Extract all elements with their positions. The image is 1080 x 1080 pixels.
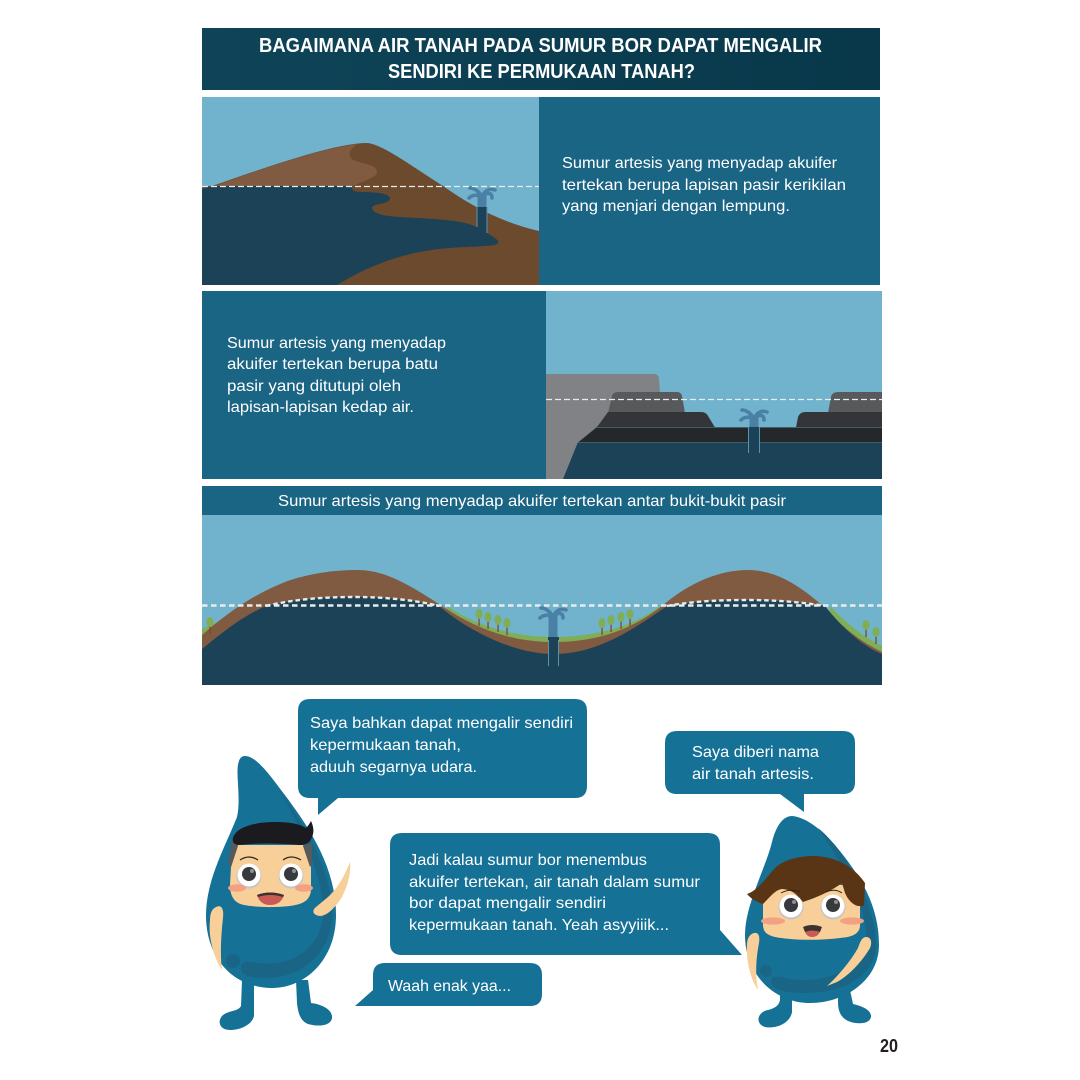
- speech bubble: right character explanation: bor dapat mengalir sendiri: [409, 895, 606, 912]
- speech bubble: right character explanation: kepermukaan tanah. Yeah asyyiiik...: [409, 917, 669, 934]
- eyes: [236, 864, 304, 888]
- speech bubble: right character explanation: Jadi kalau sumur bor menembus: [409, 852, 647, 869]
- panel: sand dunes aquifer: [202, 486, 882, 685]
- cheeks: [228, 884, 246, 892]
- speech bubble: left character: aduuh segarnya udara.: [310, 759, 477, 776]
- panel: sandstone aquifer illustration: [546, 291, 882, 479]
- mouth: [804, 926, 821, 937]
- character: left water drop boy: [206, 756, 350, 1030]
- speech bubble: right character explanation: akuifer tertekan, air tanah dalam sumur: [409, 874, 701, 891]
- impermeable layer: middle: [597, 412, 882, 428]
- artesian well and fountain: [469, 188, 495, 234]
- trees: [206, 609, 880, 644]
- hill: dark clay: [202, 143, 539, 285]
- face: [763, 885, 860, 940]
- legs and feet: [220, 980, 332, 1030]
- aquifer top dashed line: [266, 597, 825, 606]
- raised arm: [313, 862, 350, 916]
- eyebrows: [781, 890, 842, 893]
- speech bubble: right character name: Saya diberi nama: [692, 744, 819, 761]
- drop body: [206, 756, 336, 988]
- hair: [233, 821, 313, 845]
- drop body: [745, 816, 879, 1003]
- impermeable layer: upper: [608, 392, 882, 413]
- panel: text gravel sand aquifer: [539, 97, 880, 285]
- panel: text sandstone aquifer: pasir yang ditutupi oleh: [227, 378, 401, 395]
- title banner: SENDIRI KE PERMUKAAN TANAH?: [388, 61, 695, 83]
- cheeks: [761, 917, 785, 925]
- speech bubble: right character explanation: [390, 833, 742, 955]
- water table dashed line: [202, 186, 539, 188]
- dark spot: [226, 954, 240, 968]
- eyes: [778, 894, 846, 920]
- title banner: [202, 28, 880, 90]
- brown sand layer: [202, 570, 882, 670]
- panel: text sandstone aquifer: lapisan-lapisan kedap air.: [227, 399, 414, 416]
- page number: 20: [880, 1036, 898, 1056]
- green ground: [202, 606, 882, 660]
- panel: text sandstone aquifer: [202, 291, 546, 479]
- speech bubble: left character reply: [355, 963, 542, 1006]
- speech bubble: right character name: [665, 731, 855, 812]
- hill: light sand layer: [212, 144, 377, 187]
- legs and feet: [759, 990, 871, 1027]
- mouth: [257, 892, 284, 905]
- dark spot: [760, 965, 772, 977]
- artesian well and fountain: [741, 410, 767, 453]
- title banner: BAGAIMANA AIR TANAH PADA SUMUR BOR DAPAT MENGALIR: [259, 35, 823, 57]
- sandstone aquifer: [563, 442, 882, 479]
- sideburns: [228, 837, 312, 867]
- confined aquifer: [202, 597, 882, 685]
- panel: text gravel sand aquifer: tertekan berupa lapisan pasir kerikilan: [562, 177, 846, 194]
- confined aquifer: [202, 186, 498, 285]
- panel heading: [202, 486, 882, 515]
- speech bubble: left character: kepermukaan tanah,: [310, 737, 461, 754]
- left arm: [747, 933, 759, 990]
- character: right water drop girl: [745, 816, 879, 1027]
- speech bubble: left character: [298, 699, 587, 815]
- right arm: [827, 937, 871, 986]
- speech bubble: left character: Saya bahkan dapat mengalir sendiri: [310, 715, 573, 732]
- panel: text sandstone aquifer: Sumur artesis yang menyadap: [227, 335, 446, 352]
- body shading: [771, 828, 876, 993]
- panel: text sandstone aquifer: akuifer tertekan berupa batu: [227, 356, 438, 373]
- grey outcrop: [546, 374, 660, 479]
- face: [230, 845, 311, 907]
- panel: text gravel sand aquifer: yang menjari dengan lempung.: [562, 198, 790, 215]
- left arm: [210, 906, 223, 970]
- artesian well and fountain: [540, 608, 566, 666]
- panel: text gravel sand aquifer: Sumur artesis yang menyadap akuifer: [562, 155, 838, 172]
- impermeable layer: lower: [578, 427, 882, 442]
- water table dashed line: [546, 398, 882, 400]
- panel: gravel sand aquifer illustration: [202, 97, 539, 285]
- speech bubble: right character name: air tanah artesis.: [692, 766, 814, 783]
- panel heading: Sumur artesis yang menyadap akuifer tertekan antar bukit-bukit pasir: [278, 493, 787, 510]
- speech bubble: left character reply: Waah enak yaa...: [388, 978, 511, 995]
- hair: [747, 856, 865, 906]
- body shading: [241, 788, 332, 978]
- water table dashed line: [202, 604, 882, 607]
- eyebrows: [240, 857, 301, 860]
